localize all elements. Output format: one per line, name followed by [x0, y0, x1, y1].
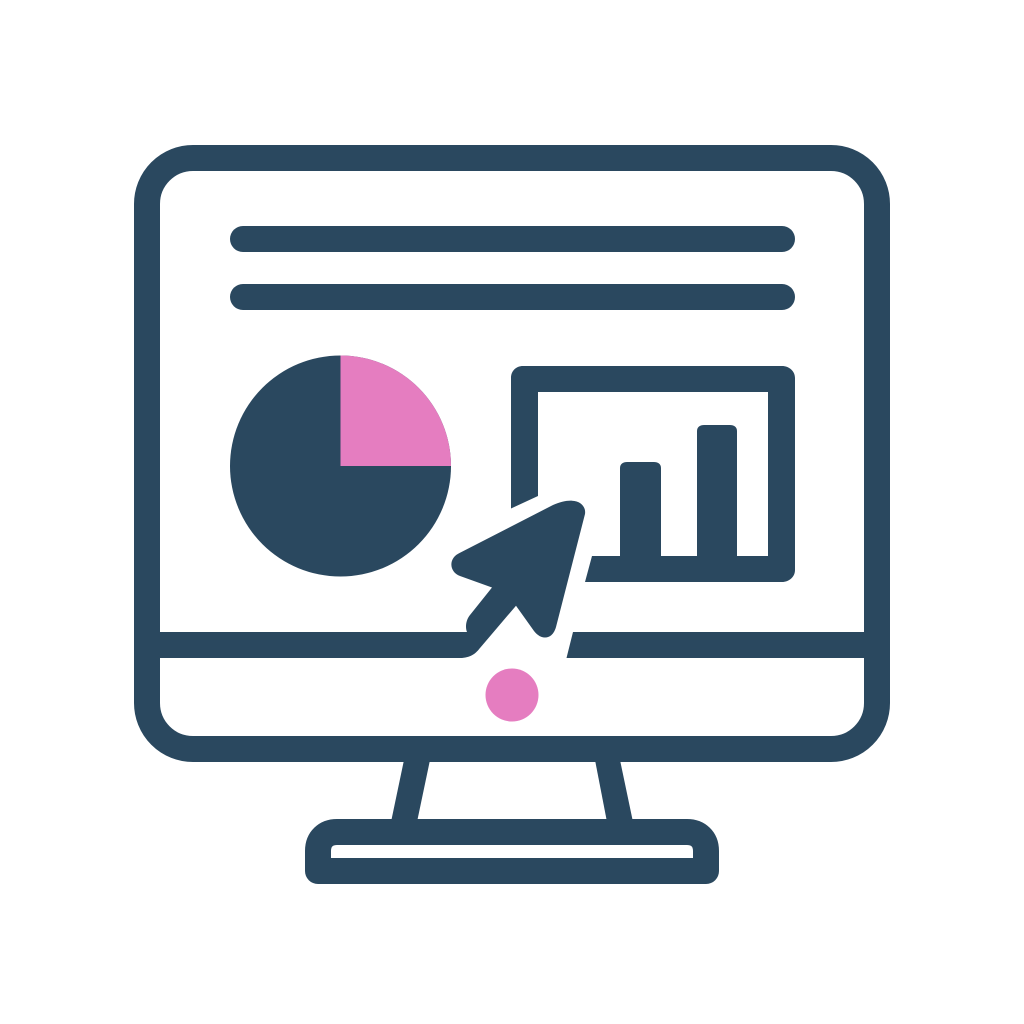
bar chart panel: [511, 366, 795, 582]
power button: [486, 668, 538, 722]
monitor frame: [147, 158, 877, 749]
bar: short: [620, 462, 661, 556]
text line 2: [230, 284, 795, 310]
monitor bezel divider, right segment: [566, 632, 877, 658]
monitor stand neck: [391, 760, 633, 822]
monitor stand base: [318, 832, 706, 871]
arrow cursor merged with left bezel divider: [147, 501, 585, 658]
bar: tall: [697, 425, 737, 556]
text line 1: [230, 226, 795, 252]
pie chart: [230, 356, 451, 576]
pie slice: highlighted quarter: [340, 356, 451, 466]
